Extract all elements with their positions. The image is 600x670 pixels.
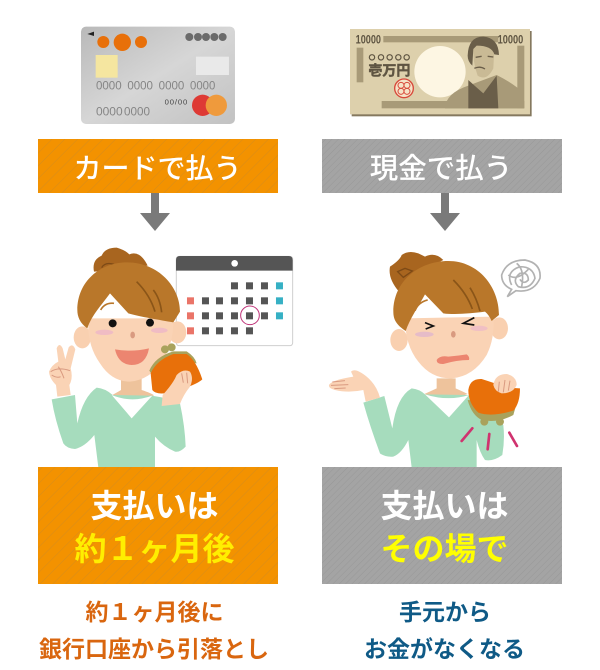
icon: ten thousand yen banknotes — [350, 29, 532, 116]
heading bar: pay by cash — [322, 139, 562, 193]
text: cash note: 手元から — [399, 599, 491, 625]
text: card note: 銀行口座から引落とし — [39, 636, 269, 662]
icon: credit card: 00/00 — [165, 98, 187, 107]
icon: ten thousand yen banknotes: 10000 — [498, 33, 524, 47]
text: on the spot: その場で — [380, 531, 509, 567]
arrow: card down — [140, 193, 170, 231]
heading bar: pay by card — [38, 139, 278, 193]
icon: credit card: 0000 — [159, 79, 185, 93]
panel: payment on the spot — [322, 467, 562, 584]
text: card note: 約１ヶ月後に — [86, 599, 224, 625]
text: payment is: 支払いは — [90, 488, 219, 524]
panel: payment about one month later — [38, 467, 278, 584]
icon: credit card: 0000 — [96, 104, 123, 118]
arrow: cash down — [430, 193, 460, 231]
heading bar: pay by card: カードで払う — [73, 153, 242, 184]
illustration: happy woman with purse — [49, 248, 202, 467]
icon: credit card — [81, 27, 235, 124]
text: payment is: 支払いは — [380, 488, 509, 524]
illustration: upset woman with empty purse — [329, 252, 520, 467]
icon: ten thousand yen banknotes: 10000 — [356, 33, 381, 47]
icon: credit card: 0000 — [190, 79, 216, 93]
icon: scribble speech bubble — [502, 260, 540, 297]
icon: credit card: 0000 — [124, 104, 150, 118]
icon: credit card: 0000 — [96, 79, 122, 93]
icon: ten thousand yen banknotes: 壱万円 — [368, 62, 410, 78]
heading bar: pay by cash: 現金で払う — [370, 153, 512, 185]
icon: credit card: 0000 — [127, 79, 153, 93]
icon: calendar — [176, 256, 293, 346]
text: about one month later: 約１ヶ月後 — [74, 531, 235, 567]
text: cash note: お金がなくなる — [364, 636, 525, 662]
text: cash note — [364, 599, 525, 662]
text: card note — [39, 599, 269, 662]
